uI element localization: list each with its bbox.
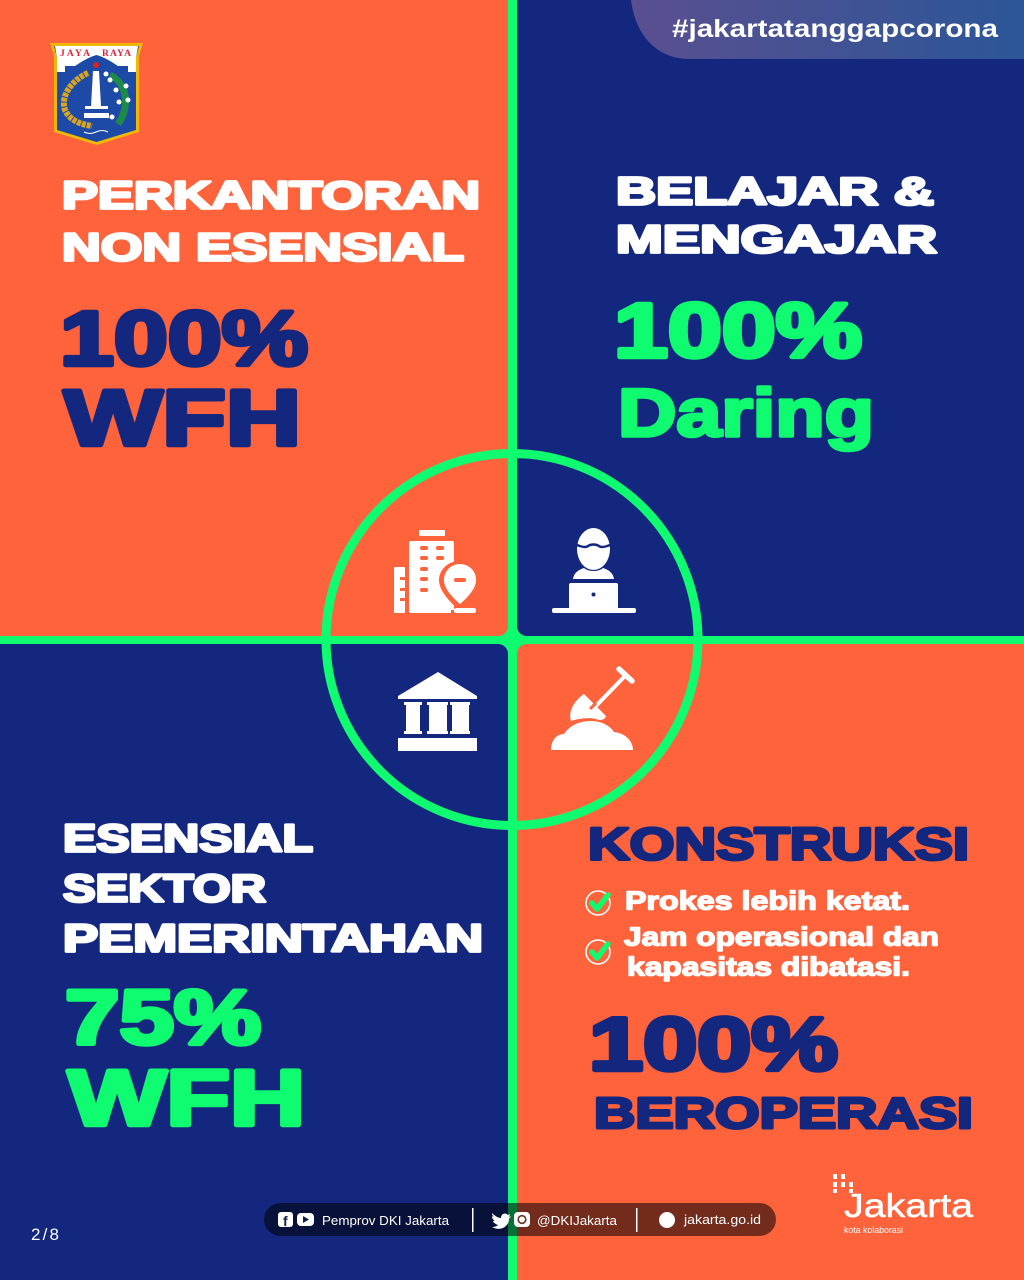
heading: perkantoran non esensial: PERKANTORAN — [62, 174, 480, 218]
logo: Jakarta kota kolaborasi: kota kolaborasi — [844, 1225, 903, 1235]
logo: Jakarta kota kolaborasi: Jakarta — [844, 1187, 974, 1224]
icon: check 1 — [586, 891, 610, 915]
heading: esensial sektor pemerintahan: SEKTOR — [63, 868, 266, 910]
heading: perkantoran non esensial: NON ESENSIAL — [62, 226, 464, 270]
stat: 75% WFH — [65, 975, 305, 1142]
stat: 100% beroperasi: BEROPERASI — [594, 1089, 973, 1138]
stat: 100% daring — [614, 288, 874, 451]
icon: facebook — [278, 1212, 293, 1229]
heading: esensial sektor pemerintahan: ESENSIAL — [63, 818, 313, 860]
stat: 100% WFH: WFH — [64, 373, 301, 462]
logo: Jakarta kota kolaborasi — [833, 1174, 974, 1235]
text: jam operasional — [624, 922, 939, 982]
icon: shovel in soil — [551, 669, 633, 750]
stat: 75% WFH: WFH — [68, 1053, 305, 1142]
center ring — [326, 454, 698, 826]
heading: belajar dan mengajar: MENGAJAR — [616, 218, 937, 262]
text: jam operasional: kapasitas dibatasi. — [627, 952, 910, 982]
icon: website — [659, 1212, 675, 1228]
hashtag tab — [631, 0, 1024, 59]
heading: belajar dan mengajar: BELAJAR & — [616, 170, 934, 214]
stat: 100% WFH — [60, 296, 308, 462]
stat: 100% WFH: 100% — [60, 296, 308, 382]
heading: belajar dan mengajar — [616, 170, 937, 262]
label: jakarta.go.id: jakarta.go.id — [683, 1212, 761, 1227]
stat: 100% beroperasi — [589, 1002, 973, 1138]
icon: person with laptop — [552, 528, 636, 613]
panel: esensial sektor pemerintahan — [0, 644, 508, 1280]
panel: konstruksi — [517, 644, 1024, 1280]
icon: youtube — [297, 1213, 314, 1226]
icon: facebook: f — [283, 1213, 288, 1229]
label: @DKIJakarta: @DKIJakarta — [537, 1213, 618, 1228]
checklist — [586, 886, 939, 982]
stat: 100% daring: 100% — [614, 288, 862, 374]
panel: belajar mengajar — [517, 0, 1024, 636]
page number: 2/8 — [31, 1225, 59, 1244]
stat: 100% daring: Daring — [618, 375, 874, 451]
hashtag tab: #jakartatanggapcorona — [672, 15, 999, 43]
text: jam operasional: Jam operasional dan — [624, 922, 939, 952]
heading: esensial sektor pemerintahan — [63, 818, 483, 960]
logo: Jakarta emblem: RAYA — [102, 49, 131, 59]
icon: government building — [398, 672, 477, 751]
social media pill — [264, 1203, 776, 1236]
logo: Jakarta emblem: JAYA — [60, 49, 90, 59]
icon: check 2 — [586, 940, 610, 964]
stat: 75% WFH: 75% — [65, 975, 261, 1061]
icon: office building with pin — [394, 530, 480, 613]
stat: 100% beroperasi: 100% — [589, 1002, 838, 1086]
panel: perkantoran non esensial — [0, 0, 508, 636]
icon: instagram — [514, 1212, 530, 1227]
logo: Jakarta emblem — [50, 43, 143, 145]
heading: konstruksi: KONSTRUKSI — [588, 818, 969, 870]
heading: perkantoran non esensial — [62, 174, 480, 270]
text: prokes: Prokes lebih ketat. — [625, 886, 910, 916]
icon: twitter — [492, 1213, 511, 1229]
label: Pemprov DKI Jakarta: Pemprov DKI Jakarta — [322, 1213, 450, 1228]
heading: esensial sektor pemerintahan: PEMERINTAHAN — [63, 918, 483, 960]
